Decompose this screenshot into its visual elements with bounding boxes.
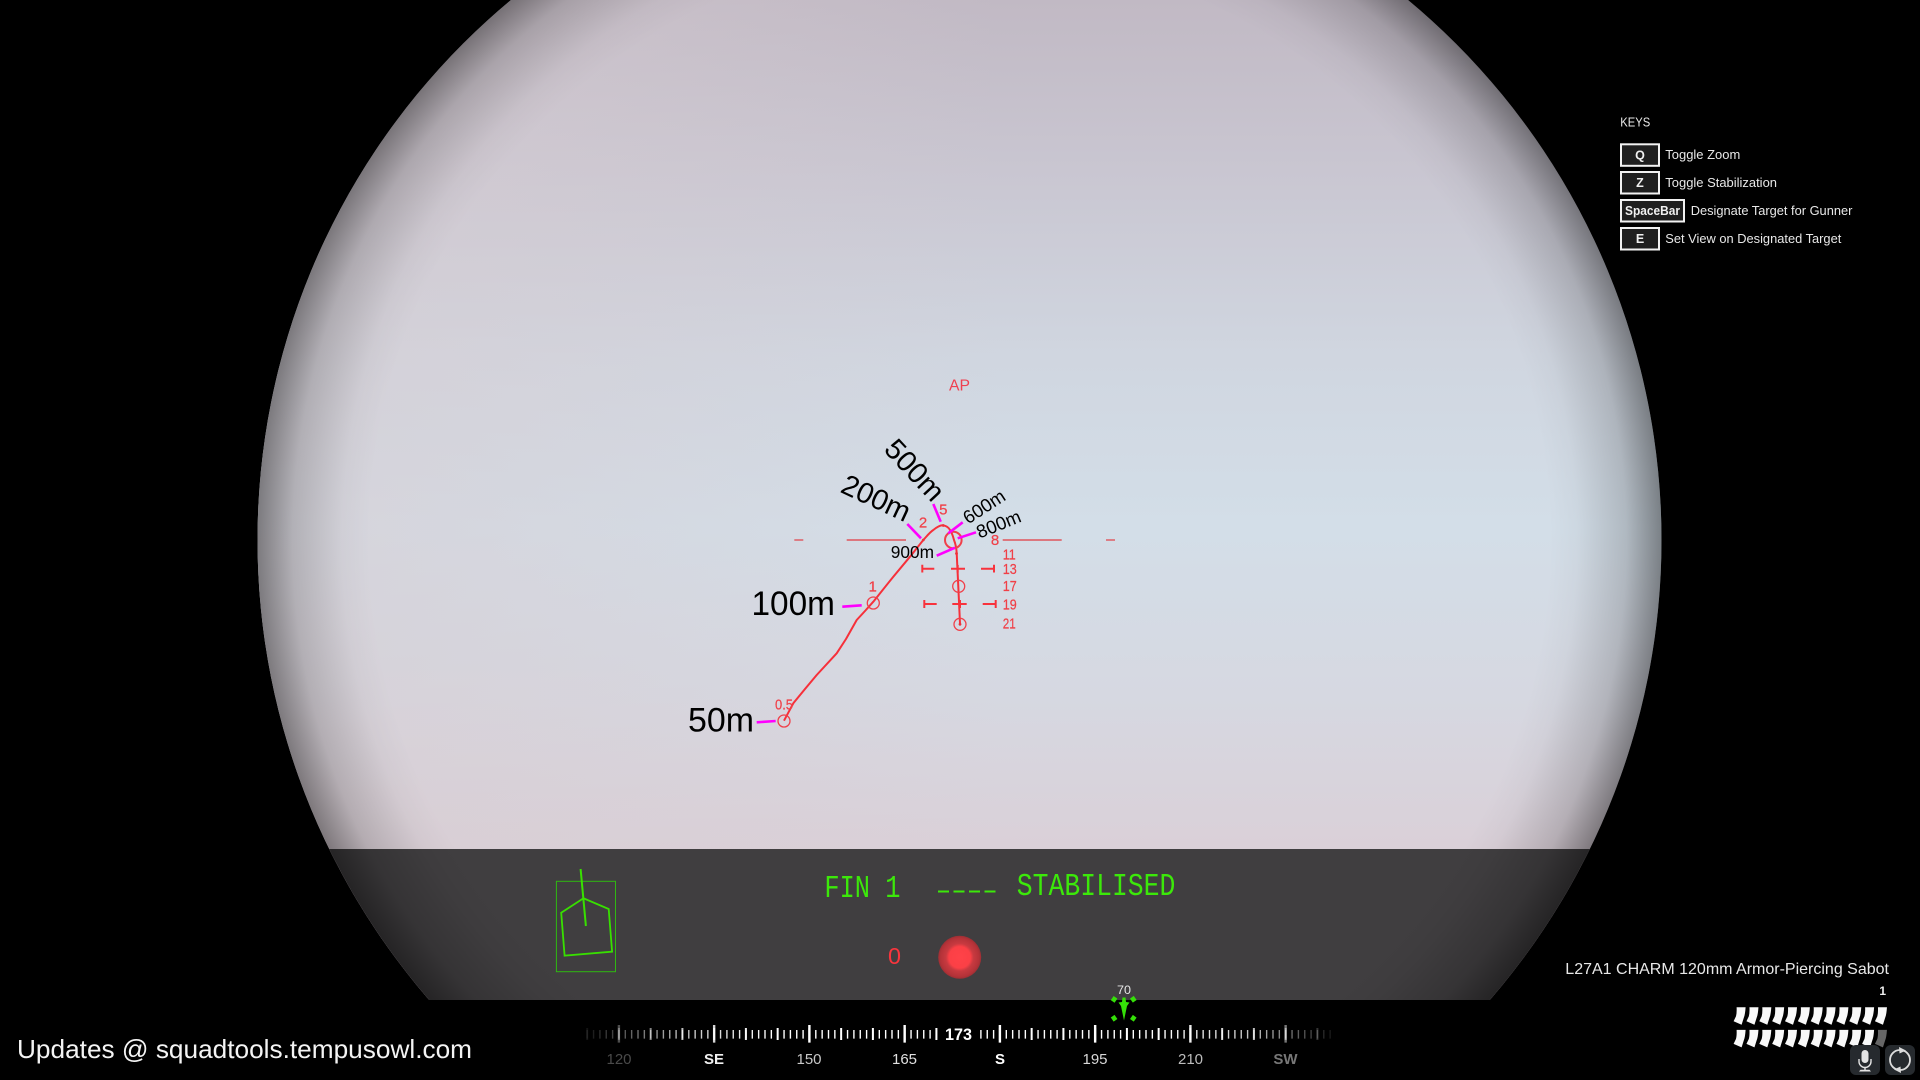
status: dashes — [938, 890, 996, 892]
bearing labels: 210 — [1178, 1051, 1203, 1068]
500m callout: 500m — [878, 433, 951, 508]
ammo count: 1 — [1879, 984, 1886, 998]
marker value: 70 — [1117, 983, 1131, 997]
icon: red status light — [938, 936, 981, 979]
icon: vehicle orientation indicator — [556, 869, 616, 972]
scope view — [257, 0, 1662, 1000]
weapon name: L27A1 CHARM 120mm Armor-Piercing Sabot — [1565, 961, 1890, 978]
800m callout: 800m — [973, 506, 1024, 542]
range numbers: 0.5 — [775, 696, 793, 713]
reticle horizontal stadia — [794, 539, 1115, 541]
crosshair row 13 — [922, 565, 994, 572]
key: Q: Q — [1635, 148, 1645, 162]
50m callout: 50m — [688, 702, 754, 740]
updates credit: Updates @ squadtools.tempusowl.com — [17, 1034, 472, 1064]
current bearing: 173 — [945, 1025, 972, 1044]
sight reticle marks — [775, 501, 1017, 727]
key: E — [1621, 228, 1842, 250]
range numbers: 21 — [1003, 616, 1016, 633]
crosshair row 19 — [924, 600, 996, 608]
range numbers — [775, 501, 1017, 713]
current bearing — [938, 1022, 976, 1046]
key: Z: Z — [1636, 176, 1644, 190]
trajectory curve — [784, 525, 960, 721]
900m callout — [891, 542, 955, 562]
keys panel — [1620, 114, 1853, 250]
range numbers: 2 — [919, 515, 927, 532]
key: Z: Toggle Stabilization — [1665, 175, 1777, 190]
key: Q: Toggle Zoom — [1665, 147, 1740, 162]
status: fin 1: FIN 1 — [824, 870, 900, 907]
status: zero counter: 0 — [888, 943, 901, 969]
key: E: E — [1636, 232, 1644, 246]
key: SpaceBar: Designate Target for Gunner — [1691, 203, 1853, 218]
range numbers: 8 — [991, 532, 999, 549]
key: SpaceBar: SpaceBar — [1625, 204, 1680, 218]
ammo icons — [1734, 1007, 1887, 1047]
bearing indicator tick marks — [585, 1029, 1335, 1039]
900m callout: 900m — [891, 542, 934, 562]
bearing labels: SE — [704, 1051, 724, 1068]
600m callout: 600m — [959, 485, 1009, 528]
bearing labels: 120 — [606, 1051, 632, 1068]
key: Q — [1621, 144, 1740, 166]
range numbers: 19 — [1003, 596, 1017, 613]
200m callout: 200m — [836, 469, 915, 529]
key: Z — [1621, 172, 1777, 194]
target marker — [1111, 983, 1137, 1022]
bearing labels: 165 — [892, 1051, 917, 1068]
range numbers: 1 — [869, 579, 877, 596]
icon: microphone — [1850, 1045, 1880, 1075]
bearing labels: SW — [1273, 1051, 1298, 1068]
icon: refresh — [1885, 1045, 1915, 1075]
distance annotations — [688, 433, 1024, 740]
key: E: Set View on Designated Target — [1665, 231, 1842, 246]
bearing labels: 195 — [1082, 1051, 1108, 1068]
status: stabilised: STABILISED — [1017, 869, 1175, 905]
range circles — [778, 524, 966, 727]
bearing labels: 150 — [796, 1051, 822, 1068]
icon: green target bracket — [1111, 996, 1137, 1022]
range numbers: 5 — [939, 501, 947, 518]
bearing labels — [606, 1051, 1298, 1068]
range numbers: 11 — [1003, 546, 1016, 563]
bearing labels: S — [995, 1051, 1005, 1068]
100m callout: 100m — [752, 585, 835, 623]
range numbers: 17 — [1003, 578, 1017, 595]
key: SpaceBar — [1621, 200, 1853, 222]
range numbers: 13 — [1003, 561, 1017, 578]
keys heading: KEYS — [1620, 114, 1651, 130]
ammo type label: AP — [949, 378, 970, 394]
